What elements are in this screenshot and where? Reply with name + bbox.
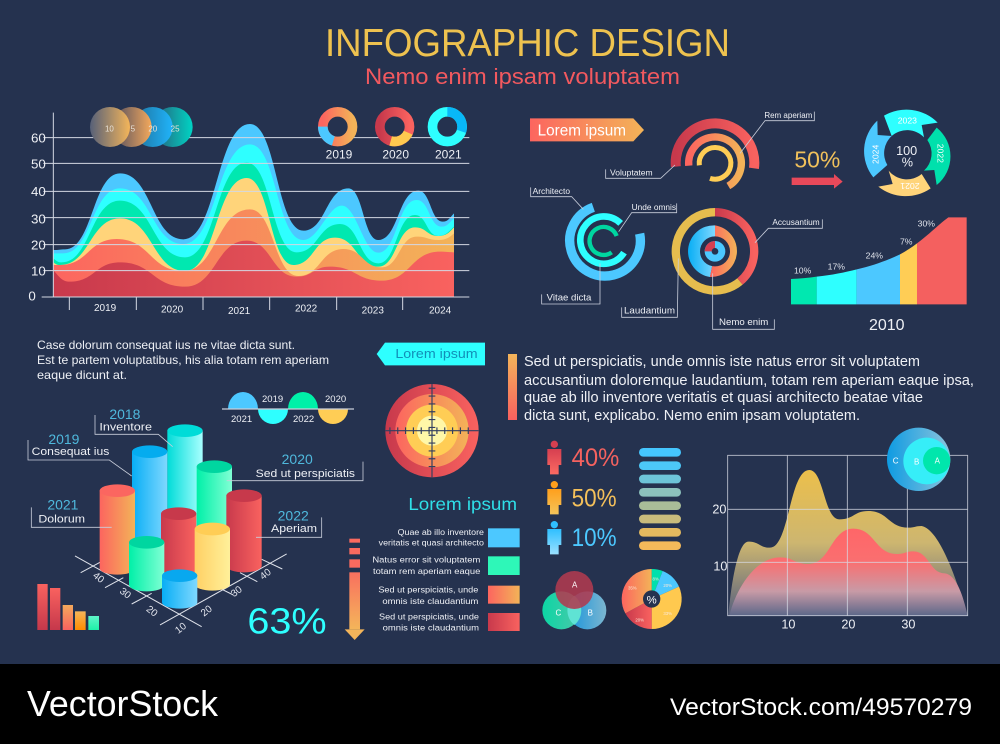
label: Rem aperiam: Rem aperiam <box>764 110 812 120</box>
tag: Lorem ipsum: Lorem ipsum <box>538 122 626 139</box>
cylinder: 2022 <box>226 489 262 572</box>
base grid and axis numbers: 20 <box>199 603 215 619</box>
label: 2021 Dolorum <box>31 496 112 527</box>
arrow: down <box>345 539 365 640</box>
overlapping circles legend: 10 <box>105 125 114 134</box>
y axis labels: 50 <box>31 157 46 172</box>
tag: Lorem ipsum cyan: Lorem ipsum <box>395 346 478 361</box>
legend row: orange: omnis iste claudantium <box>382 596 478 606</box>
overlapping circles legend <box>90 107 193 147</box>
label: 2022 Aperiam <box>256 507 322 537</box>
63 percent: 63% <box>247 600 327 641</box>
cylinder: 2019 <box>132 445 167 563</box>
wave timeline: 2022 <box>293 414 314 425</box>
person stat: 40 percent <box>547 441 619 474</box>
area layer: blue <box>53 124 454 297</box>
panel: target and legend <box>345 343 520 640</box>
growth area chart: 2010: 2010 <box>869 317 905 334</box>
text block: main paragraph: Sed ut perspiciatis, unde omnis iste natus error sit voluptatem <box>524 354 920 370</box>
x axis labels: 2021 <box>228 306 251 317</box>
label: Vitae dicta <box>542 263 600 304</box>
area layer: green <box>53 163 454 297</box>
x axis labels: 2020 <box>161 304 184 315</box>
legend row: blue: Quae ab illo inventore <box>398 527 484 537</box>
panel: stacked area chart <box>28 107 469 317</box>
label: 2019 Consequat ius: Consequat ius <box>32 446 110 458</box>
chart axis labels: 10 <box>713 560 727 574</box>
gradient pill bars <box>639 448 681 550</box>
cylinder: 2018 <box>167 424 203 550</box>
tag: Lorem ipsum <box>530 118 644 141</box>
donut: 2021 <box>432 112 462 161</box>
subtitle: Nemo enim ipsam voluptatem <box>365 64 680 89</box>
donut: 2021: 2021 <box>435 147 462 161</box>
nested circles A B C: A <box>935 456 941 465</box>
chart axis labels: 20 <box>841 617 855 631</box>
label: Accusantium <box>755 217 822 243</box>
target chart <box>385 384 479 477</box>
base grid and axis numbers: 20 <box>144 604 160 620</box>
pie chart: 35% <box>628 585 637 590</box>
growth area chart: 2010: 17% <box>828 261 845 271</box>
base grid and axis numbers <box>75 554 287 636</box>
pie chart <box>622 569 682 629</box>
panel: people, pills, venn and pie <box>542 441 682 629</box>
watermark band <box>0 664 1000 744</box>
cylinder: front blue <box>162 569 197 609</box>
base grid and axis numbers: 30 <box>229 584 245 600</box>
label: Accusantium: Accusantium <box>772 217 820 227</box>
legend row: red: Sed ut perspiciatis, unde <box>379 611 479 621</box>
label: 2020 Sed ut perspiciatis: 2020 <box>282 451 313 467</box>
label: Rem aperiam <box>740 110 814 153</box>
legend row: orange <box>378 585 520 606</box>
text block: main paragraph <box>524 354 974 424</box>
nested circles A B C: C <box>893 456 899 465</box>
y axis labels: 30 <box>31 211 46 226</box>
growth area chart: 2010 <box>791 217 967 334</box>
chart grid <box>728 455 968 616</box>
cylinder: 2021 <box>100 484 135 575</box>
pie chart: 33% <box>663 611 672 616</box>
chart axis labels: 30 <box>901 617 915 631</box>
person stat: 10 percent <box>547 521 617 554</box>
panel: 3D cylinders chart <box>28 406 363 641</box>
nested circles A B C <box>887 428 950 491</box>
overlapping circles legend: 5 <box>131 125 136 134</box>
growth area chart: 2010: 7% <box>900 236 913 246</box>
y axis labels: 0 <box>28 289 36 304</box>
legend row: orange: Sed ut perspiciatis, unde <box>378 585 479 595</box>
base grid and axis numbers: 10 <box>173 621 189 636</box>
label: Unde omnis <box>619 202 677 232</box>
pie chart: % <box>647 594 657 606</box>
chart axis labels: 10 <box>781 617 795 631</box>
y axis labels: 40 <box>31 184 46 199</box>
label: Vitae dicta: Vitae dicta <box>547 293 592 303</box>
venn diagram <box>542 571 606 629</box>
base grid and axis numbers: 30 <box>117 586 133 602</box>
person stat: 10 percent: 10% <box>572 524 617 552</box>
wave timeline: 2020 <box>325 394 346 405</box>
cycle chart: 100 percent: 2023 <box>898 116 917 126</box>
watermark band: VectorStock <box>27 683 219 724</box>
chart axis labels: 20 <box>712 502 726 516</box>
semicircular arcs chart <box>676 123 754 186</box>
y axis labels: 20 <box>31 237 46 252</box>
label: 2020 Sed ut perspiciatis: Sed ut perspiciatis <box>256 468 356 480</box>
y axis labels <box>28 130 46 304</box>
cylinder: middle red <box>161 507 196 580</box>
label: 2019 Consequat ius: 2019 <box>48 431 80 447</box>
y axis labels: 10 <box>31 263 46 278</box>
ring chart: C-shaped arcs <box>570 207 640 276</box>
legend row: red: omnis iste claudantium <box>383 623 479 633</box>
label: 2022 Aperiam: Aperiam <box>271 523 317 535</box>
panel: radial charts and growth chart <box>530 110 967 334</box>
growth area chart: 2010: 30% <box>918 218 935 228</box>
overlapping circles legend: 20 <box>148 125 158 134</box>
label: Unde omnis: Unde omnis <box>632 202 676 212</box>
cycle chart: 100 percent <box>864 110 950 196</box>
back area: yellow <box>728 470 968 616</box>
pie chart: 8% <box>653 577 659 582</box>
legend row: green <box>372 555 520 576</box>
label: 2022 Aperiam: 2022 <box>278 507 309 523</box>
area layer: orange <box>53 209 454 297</box>
legend row: blue <box>379 527 520 548</box>
base grid and axis numbers: 40 <box>258 567 274 582</box>
label: Nemo enim <box>713 273 774 329</box>
area layer: yellow <box>53 178 454 297</box>
arrow: red <box>792 174 843 189</box>
cycle chart: 100 percent: 2022 <box>935 144 945 163</box>
cycle chart: 100 percent: % <box>902 156 913 170</box>
accent bar <box>508 354 517 420</box>
donut: 2020 <box>380 112 409 161</box>
front area: red <box>729 529 968 616</box>
venn diagram: B <box>588 609 593 618</box>
text block: intro: eaque dicunt at. <box>37 368 127 382</box>
growth area chart: 2010: 10% <box>794 265 812 275</box>
label: Voluptatem <box>606 165 675 178</box>
base grid and axis numbers: 40 <box>90 570 106 586</box>
x axis labels: 2022 <box>295 304 318 315</box>
panel: mountain area chart <box>712 428 968 631</box>
area layer: cyan <box>53 144 454 297</box>
text block: intro: Est te partem voluptatibus, his alia totam rem aperiam <box>37 353 329 367</box>
cylinder: 2020 <box>197 460 232 556</box>
area layer: red <box>53 241 454 297</box>
y axis labels: 60 <box>31 130 46 145</box>
text block: main paragraph: quae ab illo inventore veritatis et quasi architecto beatae vitae <box>524 390 923 406</box>
50 percent: 50% <box>794 146 840 172</box>
small bar chart <box>37 584 99 630</box>
cycle chart: 100 percent: 2021 <box>900 181 920 191</box>
label: Laudantium <box>622 258 678 317</box>
label: Architecto: Architecto <box>533 186 570 196</box>
watermark band: VectorStock.com/49570279 <box>670 694 972 721</box>
text block: intro: Case dolorum consequat ius ne vitae dicta sunt. <box>37 338 295 352</box>
donut: 2020: 2020 <box>382 147 409 161</box>
x axis labels: 2024 <box>429 305 452 316</box>
wave timeline: 2021 <box>231 414 252 425</box>
x axis labels: 2019 <box>94 303 117 314</box>
label: Nemo enim: Nemo enim <box>719 317 769 327</box>
chart axis labels <box>712 502 915 631</box>
cycle chart: 100 percent: 2024 <box>870 145 880 164</box>
cycle chart: 100 percent: 100 <box>896 144 917 158</box>
text block: intro <box>37 338 329 382</box>
text block: main paragraph: dicta sunt, explicabo. Nemo enim ipsam voluptatem. <box>524 408 860 424</box>
person stat: 40 percent: 40% <box>572 444 619 472</box>
label: 2019 Consequat ius <box>28 431 132 476</box>
label: 2021 Dolorum: 2021 <box>47 496 79 512</box>
person stat: 50 percent: 50% <box>572 485 617 513</box>
label: 2018 Inventore <box>95 406 173 447</box>
nested circles A B C: B <box>914 458 919 467</box>
label: 2018 Inventore: 2018 <box>109 406 141 422</box>
pie chart: 20% <box>635 617 644 622</box>
label: Voluptatem: Voluptatem <box>610 167 653 177</box>
donut: 2019: 2019 <box>326 147 353 161</box>
wave timeline: 2019 <box>262 394 283 405</box>
wave timeline <box>222 392 354 425</box>
venn diagram: A <box>572 580 578 589</box>
overlapping circles legend: 25 <box>171 125 180 134</box>
legend row: red <box>379 611 520 633</box>
growth area chart: 2010: 24% <box>866 250 883 260</box>
label: 2020 Sed ut perspiciatis <box>227 451 363 481</box>
legend row: green: totam rem aperiam eaque <box>373 566 481 576</box>
tag: Lorem ipsum cyan <box>377 343 485 365</box>
text block: main paragraph: accusantium doloremque laudantium, totam rem aperiam eaque ipsa, <box>524 373 974 389</box>
title: INFOGRAPHIC DESIGN <box>325 22 730 65</box>
heading: Lorem ipsum: Lorem ipsum <box>408 494 517 514</box>
label: Architecto <box>531 186 583 209</box>
label: 2018 Inventore: Inventore <box>99 422 152 434</box>
concentric donut chart <box>676 212 754 290</box>
x axis labels: 2023 <box>362 305 384 316</box>
cylinder: front green <box>129 536 164 591</box>
x axis labels <box>94 303 452 317</box>
cylinder: yellow <box>195 523 230 591</box>
person stat: 50 percent <box>547 481 617 514</box>
label: 2021 Dolorum: Dolorum <box>38 513 85 525</box>
legend row: green: Natus error sit voluptatem <box>372 555 480 565</box>
legend row: blue: veritatis et quasi architecto <box>379 538 484 548</box>
grid lines and axes <box>42 113 469 310</box>
pie chart: 20% <box>663 583 672 588</box>
label: Laudantium: Laudantium <box>624 306 675 316</box>
venn diagram: C <box>555 608 561 617</box>
donut: 2019 <box>323 112 353 161</box>
